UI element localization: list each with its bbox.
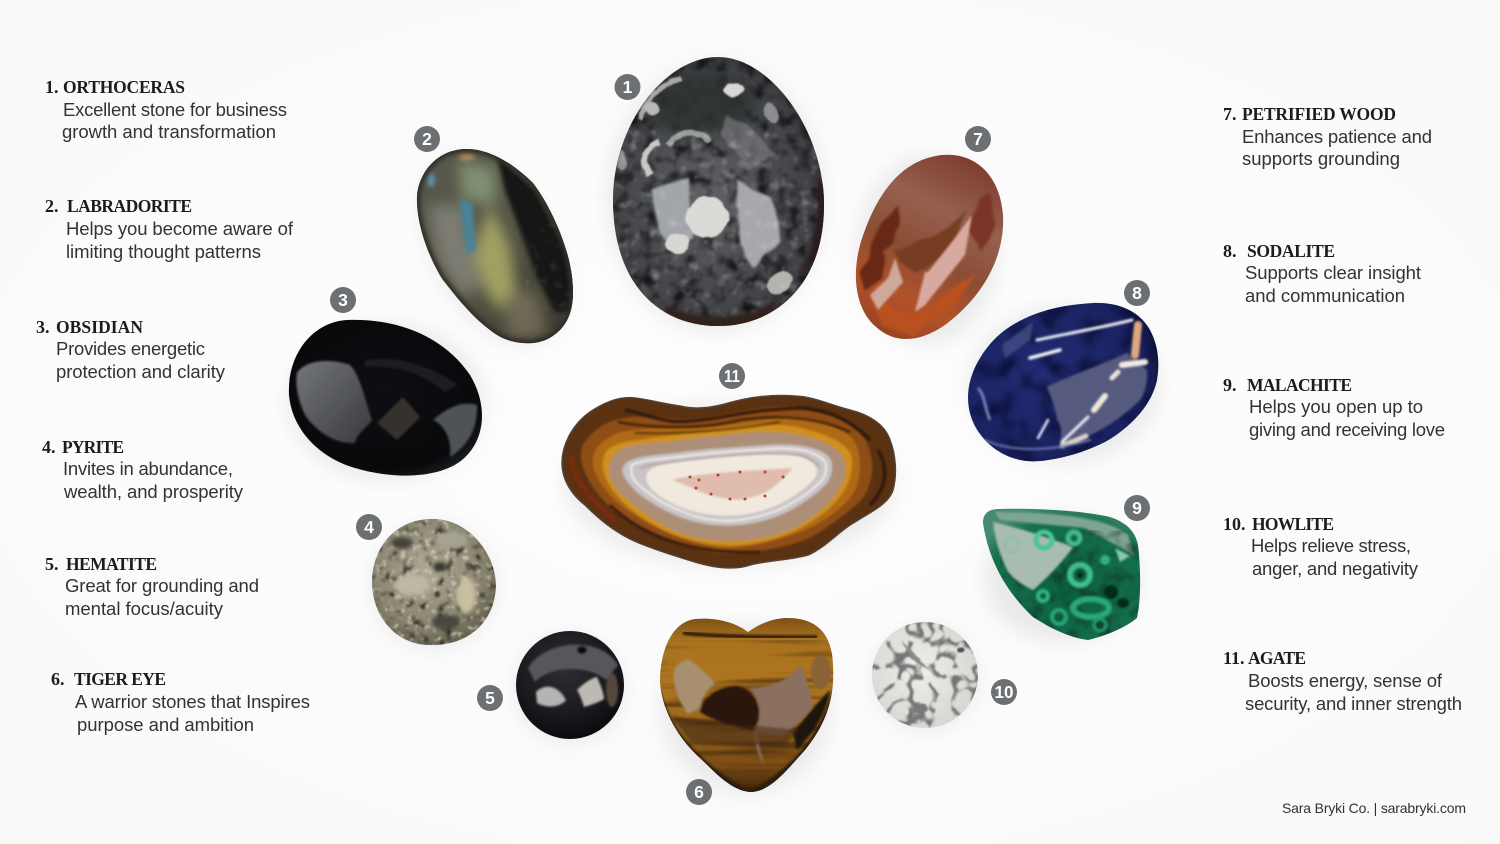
agate bands	[581, 407, 872, 554]
badge 4	[356, 514, 382, 540]
text: sodalite: Supports clear insight	[1245, 262, 1421, 283]
gray veins	[870, 620, 980, 730]
reflection facets	[978, 322, 1147, 447]
badge 5	[477, 685, 503, 711]
crystal pits	[370, 517, 498, 647]
badge 1	[614, 74, 640, 100]
badge 2	[414, 126, 440, 152]
white veins	[985, 320, 1145, 449]
text: orthoceras: ORTHOCERAS	[63, 77, 185, 97]
text: malachite	[1223, 375, 1445, 440]
smooth metallic areas	[391, 531, 476, 630]
wood patches	[862, 192, 995, 335]
blue mottling	[966, 300, 1161, 465]
text: obsidian: Provides energetic	[56, 338, 205, 359]
badge 8	[1124, 280, 1150, 306]
badge 3: 3	[338, 290, 348, 310]
text: agate: AGATE	[1248, 648, 1306, 668]
reflections	[870, 215, 972, 312]
text: tiger eye: 6.	[51, 669, 64, 689]
text: malachite: 9.	[1223, 375, 1236, 395]
text: tiger eye	[51, 669, 310, 735]
badge 9	[1124, 495, 1150, 521]
stone 8: sodalite	[966, 300, 1161, 465]
rings	[1005, 532, 1130, 631]
badge 11: 11	[724, 366, 740, 386]
gray and olive sheen	[428, 160, 548, 340]
text: orthoceras: Excellent stone for business	[63, 99, 287, 120]
text: petrified wood: PETRIFIED WOOD	[1242, 104, 1396, 124]
speckle texture	[610, 55, 826, 328]
stone 11: agate	[562, 395, 895, 568]
text: petrified wood: supports grounding	[1242, 148, 1400, 169]
text: pyrite	[42, 437, 244, 502]
text: labradorite	[45, 196, 294, 262]
badge 3	[330, 287, 356, 313]
text: petrified wood: Enhances patience and	[1242, 126, 1432, 147]
text: howlite: Helps relieve stress,	[1251, 535, 1411, 556]
number badges	[330, 74, 1150, 805]
text: tiger eye: TIGER EYE	[74, 669, 166, 689]
text: labradorite: LABRADORITE	[67, 196, 192, 216]
text: petrified wood	[1223, 104, 1432, 169]
text: agate: Boosts energy, sense of	[1248, 670, 1443, 691]
text: hematite	[45, 554, 259, 619]
badge 7	[965, 126, 991, 152]
pale fossil patches	[652, 115, 782, 268]
badge 11	[719, 363, 745, 389]
edge shading	[417, 149, 573, 343]
dark smooth upper matrix	[645, 73, 755, 137]
text: malachite: MALACHITE	[1247, 375, 1352, 395]
dark mottle	[1000, 530, 1143, 642]
blue flash	[427, 153, 476, 255]
text: pyrite: Invites in abundance,	[63, 458, 233, 479]
badge 1: 1	[623, 77, 633, 97]
text: obsidian	[36, 317, 226, 382]
badge 9: 9	[1132, 498, 1142, 518]
text: hematite: mental focus/acuity	[65, 598, 224, 619]
text: pyrite: 4.	[42, 437, 56, 457]
text: petrified wood: 7.	[1223, 104, 1236, 124]
badge 7: 7	[973, 129, 983, 149]
text: tiger eye: purpose and ambition	[77, 714, 254, 735]
text: howlite: 10.	[1223, 514, 1246, 534]
badge 2: 2	[422, 129, 432, 149]
text: agate	[1223, 648, 1462, 714]
badge 8: 8	[1132, 283, 1142, 303]
text: agate: security, and inner strength	[1245, 693, 1462, 714]
text: sodalite: 8.	[1223, 241, 1236, 261]
badge 6: 6	[694, 782, 704, 802]
text: howlite: anger, and negativity	[1252, 558, 1419, 579]
reflections	[528, 645, 618, 707]
fossil details	[618, 78, 797, 299]
stone 5: hematite	[516, 631, 624, 739]
text: howlite	[1223, 514, 1419, 579]
text: malachite: Helps you open up to	[1249, 396, 1423, 417]
brown base and rim	[662, 175, 828, 330]
text: labradorite: Helps you become aware of	[66, 218, 294, 239]
text: hematite: HEMATITE	[66, 554, 157, 574]
top dark line	[683, 633, 817, 637]
fine light speckle	[610, 130, 826, 328]
darker vein clusters	[902, 640, 965, 713]
stone 3: obsidian	[289, 320, 482, 476]
dark flank	[497, 155, 578, 312]
text: labradorite: limiting thought patterns	[66, 241, 261, 262]
pale rim	[995, 512, 1134, 555]
text: orthoceras	[45, 77, 287, 142]
glass reflections	[658, 655, 838, 794]
text: sodalite: and communication	[1245, 285, 1405, 306]
badge 5: 5	[485, 688, 495, 708]
white and dark fine band lines	[572, 408, 885, 552]
stone 4: pyrite	[370, 517, 498, 647]
text: agate: 11.	[1223, 648, 1245, 668]
stone 10: howlite	[870, 620, 980, 730]
stone 2: labradorite	[417, 149, 578, 343]
badge 10	[991, 679, 1017, 705]
stone shadows	[288, 64, 1159, 792]
text: obsidian: OBSIDIAN	[56, 317, 143, 337]
text: malachite: giving and receiving love	[1249, 419, 1445, 440]
text: labradorite: 2.	[45, 196, 58, 216]
fine chatoyant stripes	[655, 640, 840, 795]
text: hematite: Great for grounding and	[65, 575, 259, 596]
stone 7: petrified wood	[856, 155, 1003, 339]
text: orthoceras: 1.	[45, 77, 58, 97]
text: howlite: HOWLITE	[1252, 514, 1334, 534]
text: sodalite: SODALITE	[1247, 241, 1335, 261]
red spots	[688, 470, 784, 500]
stone 1: orthoceras	[610, 55, 828, 330]
badge 4: 4	[364, 517, 374, 537]
badge 10: 10	[994, 682, 1014, 702]
credit: Sara Bryki Co. | sarabryki.com	[1282, 800, 1466, 816]
badge 6	[686, 779, 712, 805]
text: hematite: 5.	[45, 554, 58, 574]
text: pyrite: wealth, and prosperity	[63, 481, 244, 502]
text: obsidian: 3.	[36, 317, 50, 337]
stone 6: tiger eye heart	[655, 618, 840, 795]
stone 9: malachite	[983, 509, 1143, 642]
gray patch	[993, 522, 1073, 590]
text: tiger eye: A warrior stones that Inspires	[75, 691, 310, 712]
reflections	[296, 359, 477, 457]
text: pyrite: PYRITE	[62, 437, 124, 457]
text: obsidian: protection and clarity	[56, 361, 226, 382]
text: sodalite	[1223, 241, 1421, 306]
text: orthoceras: growth and transformation	[62, 121, 276, 142]
